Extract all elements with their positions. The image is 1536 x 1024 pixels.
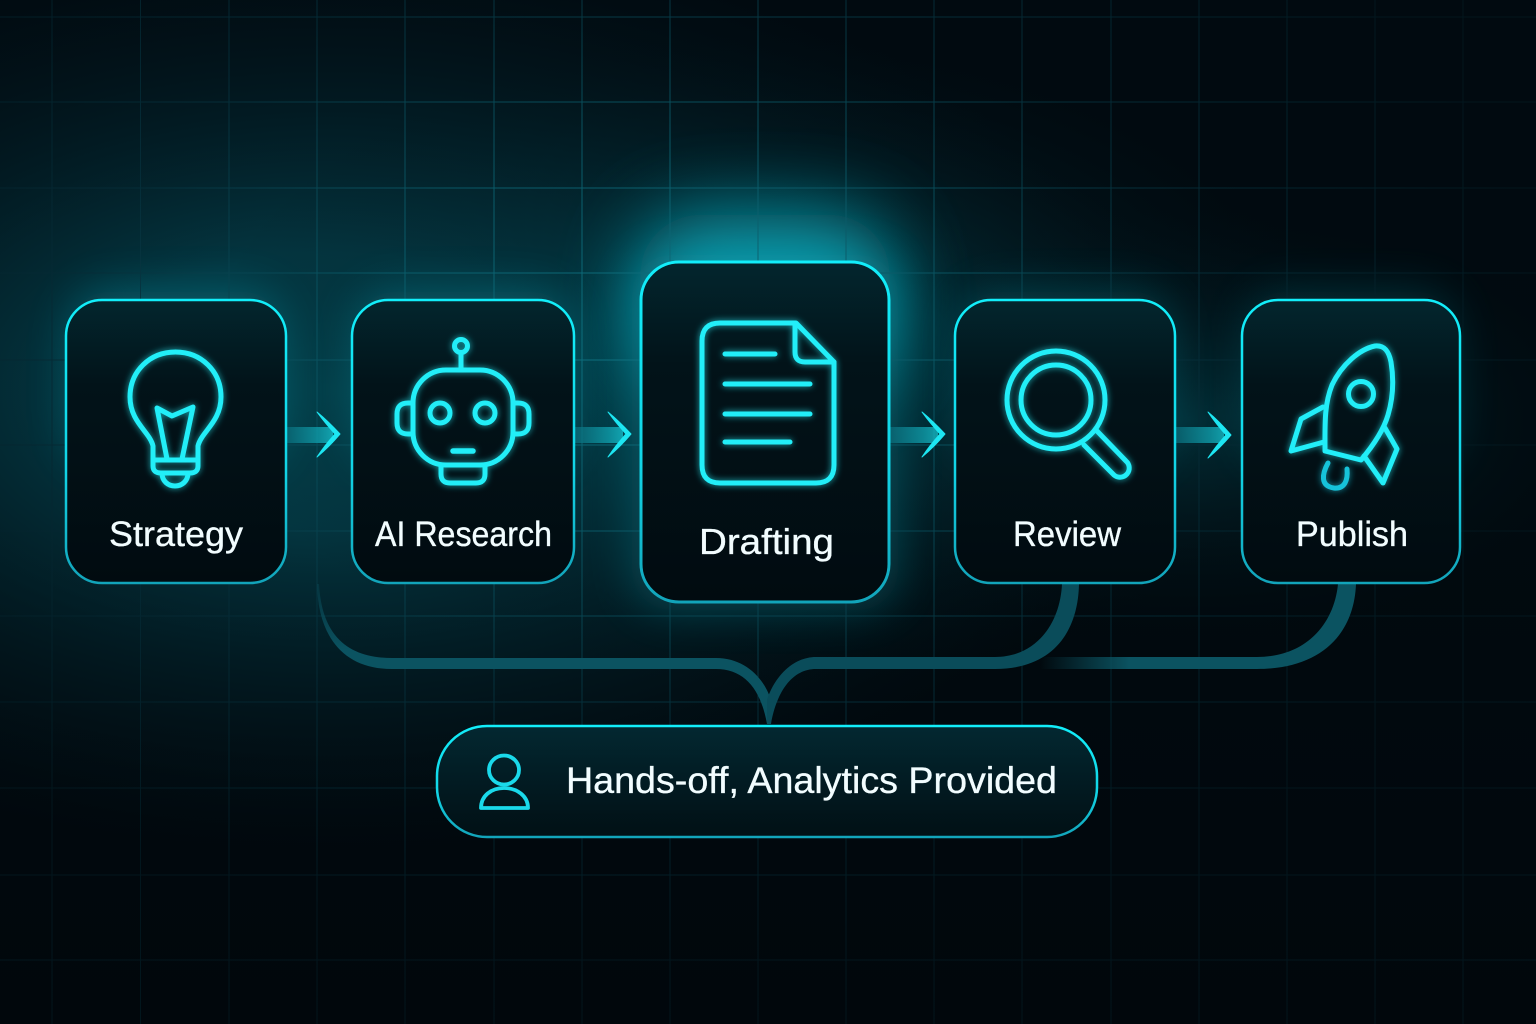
icon: light bulb [130,352,221,486]
connector: Strategy branch [317,584,771,724]
label: Drafting: Drafting [699,521,834,562]
glow behind cards [72,215,1454,610]
arrow: Strategy to AI Research [287,412,340,457]
arrow: Review to Publish [1176,412,1231,458]
icon: rocket [1291,346,1397,488]
icon: document [702,323,834,483]
icon: person [481,756,528,808]
arrow: Drafting to Review [890,412,945,457]
label: AI Research: AI Research [375,515,552,554]
label: Review: Review [1013,515,1122,554]
connector: Review branch [767,584,1079,724]
panel: Strategy [66,300,286,583]
panel: Publish [1242,300,1460,583]
panel: AI Research [352,300,574,583]
icon: robot [397,340,529,483]
icon: magnifying glass [1007,351,1129,477]
panel: Hands-off, Analytics Provided [437,726,1097,837]
connector: Publish branch [1040,584,1356,669]
connectors to the hands-off pill [317,584,1356,724]
arrow: AI Research to Drafting [575,412,631,457]
label: Publish: Publish [1296,515,1408,554]
label: Strategy: Strategy [109,515,243,554]
panel: Drafting [641,262,889,602]
panel: Review [955,300,1175,583]
label: Hands-off, Analytics Provided: Hands-off, Analytics Provided [566,760,1057,801]
